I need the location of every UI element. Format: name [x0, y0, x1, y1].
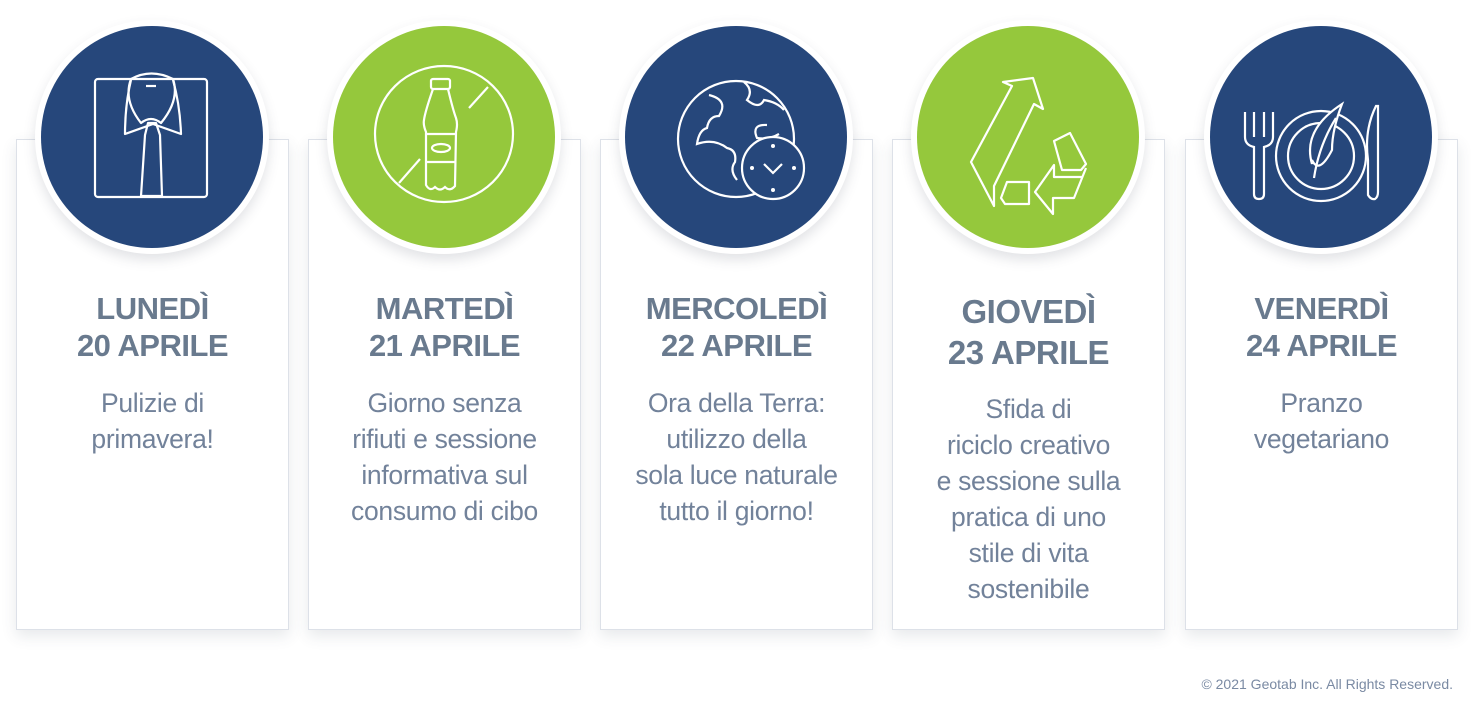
text: giovedi: riciclo creativo — [947, 430, 1110, 460]
heading: giovedi: GIOVEDÌ — [961, 293, 1096, 330]
heading: martedi — [369, 291, 520, 363]
heading: giovedi: 23 APRILE — [948, 334, 1109, 371]
text: giovedi: pratica di uno — [951, 502, 1106, 532]
icon: no bottle — [327, 20, 561, 254]
panel: lunedi — [16, 139, 289, 630]
text: giovedi: e sessione sulla — [937, 466, 1120, 496]
text: martedi: Giorno senza — [367, 388, 522, 418]
panel: mercoledi — [600, 139, 873, 630]
text: giovedi: stile di vita — [969, 538, 1088, 568]
icon: shirt — [35, 20, 269, 254]
text: mercoledi: Ora della Terra: — [648, 388, 825, 418]
icon: plate fork knife leaf — [1204, 20, 1438, 254]
heading: martedi: 21 APRILE — [369, 328, 520, 363]
text: martedi: consumo di cibo — [351, 496, 538, 526]
icon: earth clock — [619, 20, 853, 254]
heading: venerdi — [1246, 291, 1397, 363]
heading: mercoledi — [646, 291, 827, 363]
text: giovedi: sostenibile — [968, 574, 1089, 604]
text: martedi: rifiuti e sessione — [352, 424, 537, 454]
heading: venerdi: VENERDÌ — [1254, 291, 1389, 326]
panel: martedi — [308, 139, 581, 630]
text: venerdi: vegetariano — [1254, 424, 1389, 454]
text: lunedi — [91, 388, 214, 454]
text: venerdi — [1254, 388, 1389, 454]
heading: martedi: MARTEDÌ — [376, 291, 513, 326]
panel: venerdi — [1185, 139, 1458, 630]
text: mercoledi: tutto il giorno! — [659, 496, 814, 526]
heading: lunedi — [77, 291, 228, 363]
heading: mercoledi: MERCOLEDÌ — [646, 291, 827, 326]
heading: lunedi: 20 APRILE — [77, 328, 228, 363]
heading: lunedi: LUNEDÌ — [96, 291, 209, 326]
heading: mercoledi: 22 APRILE — [661, 328, 812, 363]
heading: venerdi: 24 APRILE — [1246, 328, 1397, 363]
text: giovedi — [937, 394, 1121, 604]
text: martedi: informativa sul — [361, 460, 528, 490]
text: mercoledi: utilizzo della — [666, 424, 807, 454]
text: martedi — [351, 388, 538, 526]
icon: recycle — [911, 20, 1145, 254]
copyright: © 2021 Geotab Inc. All Rights Reserved. — [1201, 676, 1453, 692]
text: venerdi: Pranzo — [1280, 388, 1363, 418]
text: lunedi: primavera! — [91, 424, 214, 454]
panel: giovedi — [892, 139, 1165, 630]
text: mercoledi — [635, 388, 838, 526]
text: lunedi: Pulizie di — [101, 388, 204, 418]
text: mercoledi: sola luce naturale — [635, 460, 838, 490]
text: giovedi: Sfida di — [986, 394, 1072, 424]
heading: giovedi — [948, 293, 1109, 371]
